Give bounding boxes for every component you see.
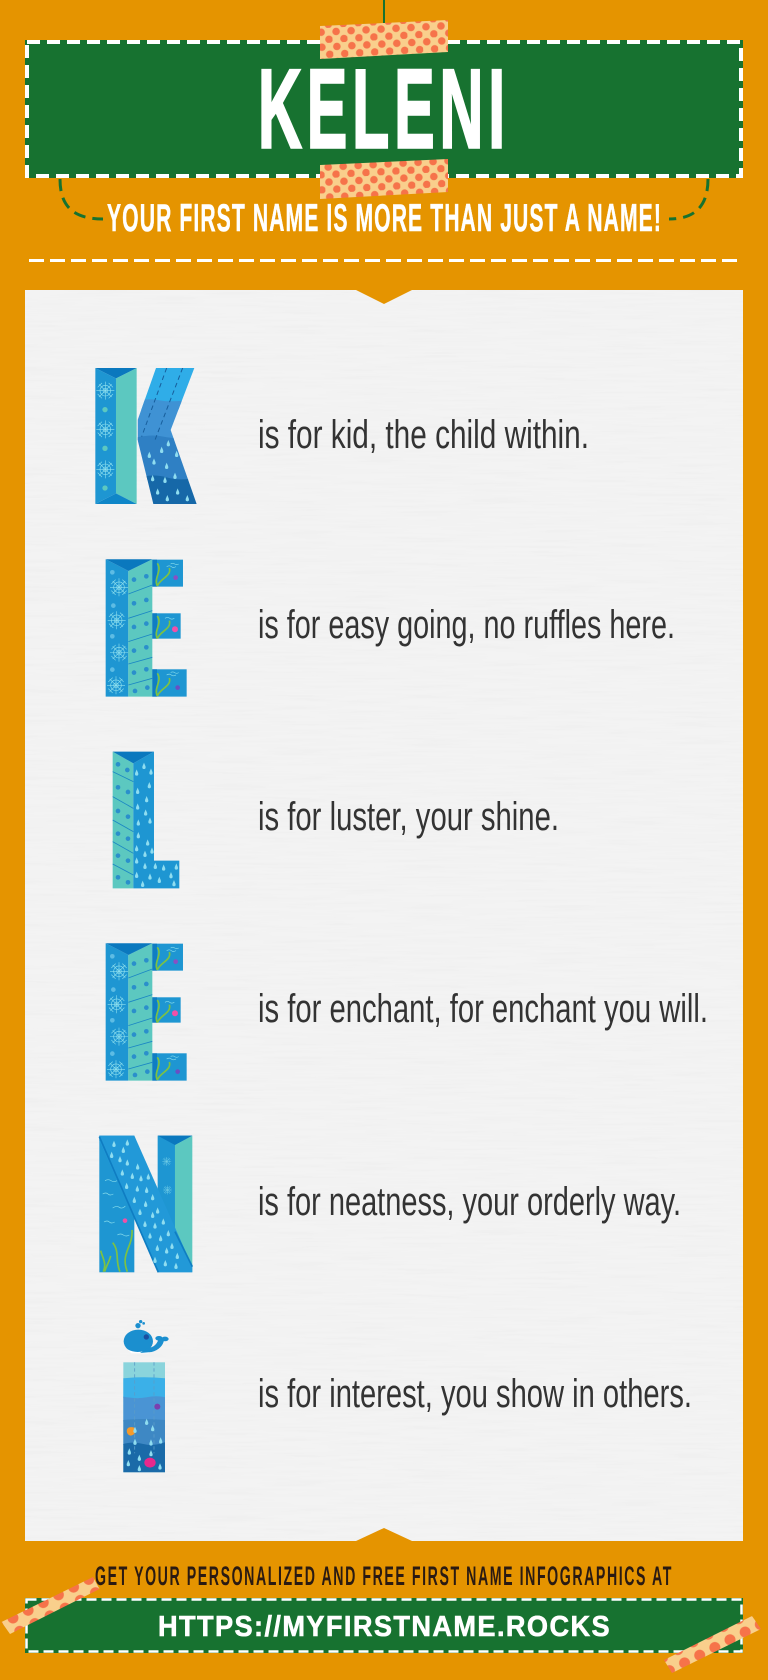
panel: title banner [25,40,743,178]
title: KELENI [258,46,510,172]
letter E [106,559,187,697]
tape: top [320,20,448,59]
icon: whale [124,1320,169,1353]
panel: url banner [25,1598,743,1653]
letter N [99,1136,192,1272]
tape: footer right [664,1616,761,1673]
tape: footer left [2,1577,100,1634]
letter K [95,367,200,507]
url: HTTPS://MYFIRSTNAME.ROCKS [158,1611,611,1643]
letter L [113,752,179,888]
hanging string [383,0,385,24]
left curved connector [60,179,103,219]
panel: letters [25,290,743,1541]
letter I [123,1320,169,1472]
tape: bottom [320,159,448,199]
text: K: is for kid, the child within. [258,413,589,457]
letter E second [106,943,187,1081]
right curved connector [669,179,708,219]
text: L: is for luster, your shine. [258,795,559,839]
